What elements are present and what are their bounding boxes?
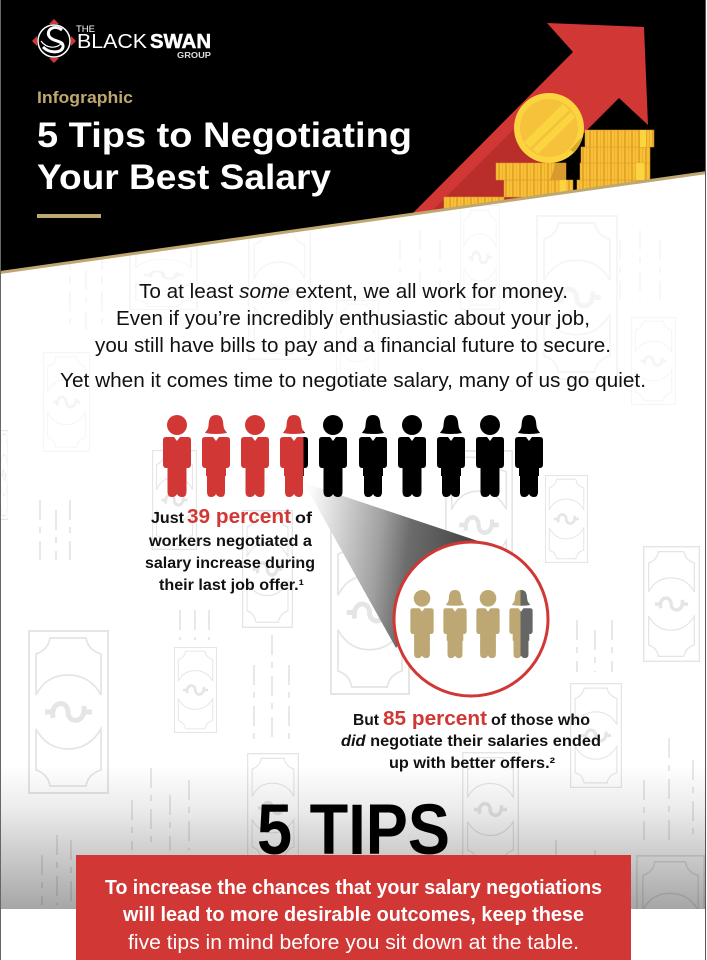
magnified circle with four gold workers bbox=[394, 542, 548, 696]
stat: 39 percent: Just bbox=[151, 510, 184, 527]
stat: 39 percent: of bbox=[295, 510, 313, 527]
stat: 85 percent: up with better offers.² bbox=[389, 755, 555, 772]
intro text: To at least some extent, we all work for money. bbox=[139, 281, 568, 303]
callout: red panel: will lead to more desirable outcomes, keep these bbox=[122, 904, 584, 926]
icon: gold coin stacks bbox=[444, 130, 654, 213]
stat: 85 percent: did negotiate their salaries ended bbox=[341, 733, 601, 750]
title bbox=[37, 116, 412, 197]
stat: 85 percent bbox=[341, 708, 601, 772]
stat: 85 percent: of those who bbox=[491, 712, 590, 729]
icon: rising red arrow bbox=[413, 23, 648, 213]
logo: The Black Swan Group bbox=[32, 19, 212, 63]
title: Your Best Salary bbox=[37, 158, 332, 197]
intro text: Even if you’re incredibly enthusiastic about your job, bbox=[116, 308, 590, 330]
logo: The Black Swan Group: THE bbox=[76, 24, 95, 34]
background pattern: money bills and dashes bbox=[0, 206, 704, 960]
intro text: you still have bills to pay and a financial future to secure. bbox=[95, 335, 611, 357]
stat: 85 percent: 85 percent bbox=[383, 708, 487, 730]
logo: The Black Swan Group: SWAN bbox=[150, 31, 211, 53]
icon: large gold coin bbox=[514, 93, 584, 163]
stat: 39 percent: salary increase during bbox=[145, 555, 315, 572]
stat: 39 percent: their last job offer.¹ bbox=[159, 577, 304, 594]
callout: red panel bbox=[76, 855, 631, 960]
lower background gradient bbox=[0, 765, 707, 909]
title: 5 Tips to Negotiating bbox=[37, 116, 412, 155]
callout: red panel: To increase the chances that your salary negotiations bbox=[105, 877, 602, 899]
stat: 39 percent: workers negotiated a bbox=[148, 533, 312, 550]
header black band bbox=[0, 0, 707, 280]
gold divider edge bbox=[0, 172, 707, 272]
stat: 39 percent bbox=[145, 506, 315, 594]
logo: The Black Swan Group: BLACK bbox=[77, 31, 148, 53]
gold title rule bbox=[37, 214, 101, 218]
zoom cone bbox=[304, 483, 478, 648]
pictogram: ten workers, four red bbox=[163, 415, 543, 497]
intro text bbox=[60, 281, 646, 392]
stat: 39 percent: 39 percent bbox=[187, 506, 291, 528]
logo: The Black Swan Group: GROUP bbox=[177, 51, 212, 60]
intro text: Yet when it comes time to negotiate salary, many of us go quiet. bbox=[60, 370, 646, 392]
eyebrow label: Infographic bbox=[37, 88, 133, 107]
heading: 5 TIPS: 5 TIPS bbox=[257, 791, 450, 870]
stat: 85 percent: But bbox=[353, 712, 379, 729]
callout: red panel: five tips in mind before you sit down at the table. bbox=[128, 932, 579, 954]
